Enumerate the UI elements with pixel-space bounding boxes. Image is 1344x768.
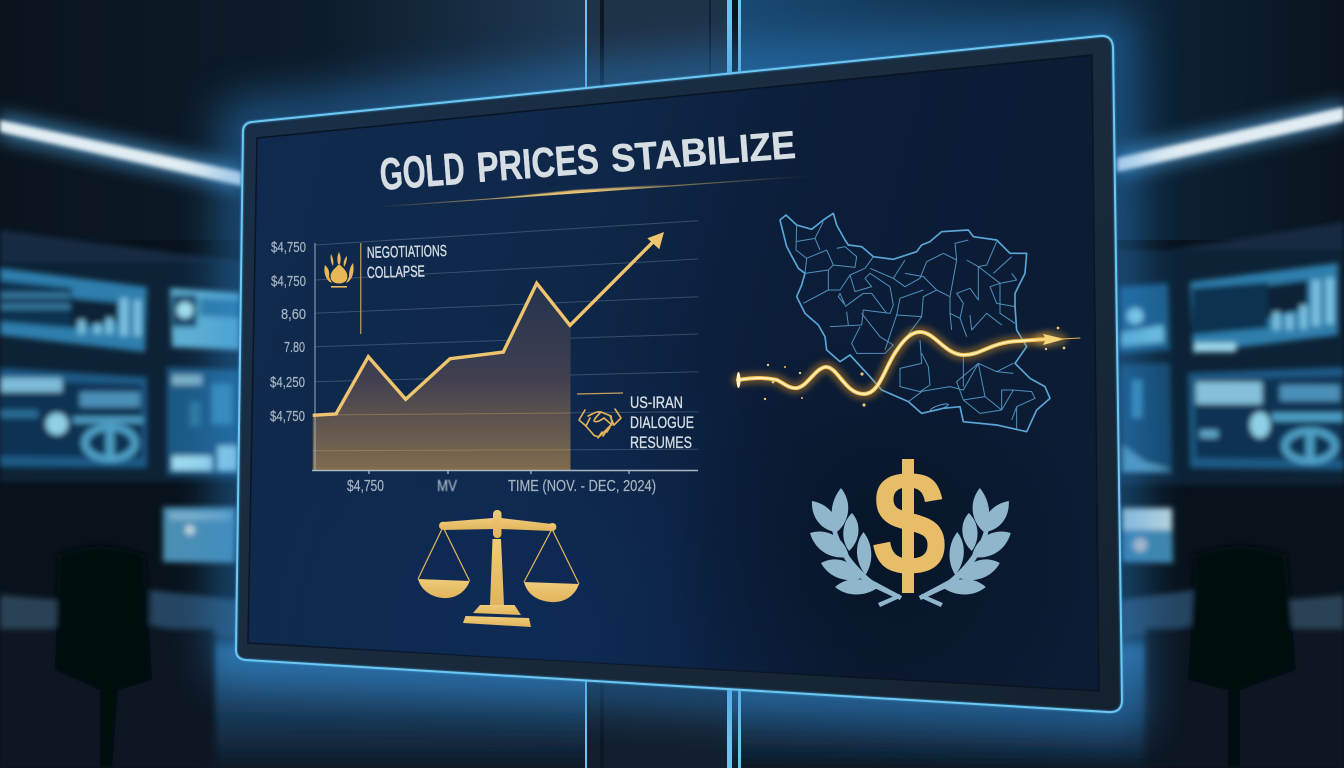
title: PRICES [475,135,600,191]
dollar sign: $ [871,440,947,608]
monitor: upper left chart [0,268,147,352]
pillar [586,0,730,768]
background desks and chairs [0,546,1344,768]
pillar light lines [585,0,741,768]
screen dark patch [248,55,1099,691]
left ceiling light strip [0,112,242,192]
monitor: right side upper panel [1120,283,1170,353]
monitor: middle side panel [167,367,240,475]
screen shading [248,55,1099,691]
axes [312,243,698,474]
title [378,124,797,200]
y axis labels [270,239,306,425]
left chair [55,546,152,768]
price line and arrow [313,232,664,415]
icon: dollar and laurel [810,440,1011,608]
divider flare [736,372,740,388]
left branch [810,488,902,607]
callout text: RESUMES [630,434,692,452]
monitor: right side lower panel [1122,508,1173,563]
area under line [313,283,570,470]
y axis labels: $4,750 [270,408,305,425]
callout leader line [360,243,362,334]
arrow head [1043,334,1065,345]
callout text: DIALOGUE [630,414,694,432]
icon: flame [324,252,354,288]
callout: negotiations collapse [324,243,447,334]
right ceiling light strip [1117,100,1344,178]
monitor: lower left gauges [0,368,147,468]
laurel wreath [810,488,1011,607]
callout text: US-IRAN [630,394,683,412]
y axis labels: $4,750 [271,239,306,256]
left background monitors [0,268,240,563]
island [930,403,949,412]
divider [738,215,740,570]
monitor: upper right chart [1190,263,1338,353]
screen surface [248,55,1099,691]
callout text: NEGOTIATIONS [367,243,447,262]
y axis labels: 8,60 [281,306,306,323]
display glow [236,35,1122,712]
panel: display screen [236,36,1122,712]
x axis labels: MV [437,478,457,495]
x axis labels: TIME (NOV. - DEC, 2024) [508,478,656,495]
map: iran provinces [780,213,1050,432]
sparkles [764,327,1065,407]
icon: handshake [579,409,621,438]
monitor: lower right gauges [1188,367,1344,470]
map internal borders [796,222,1035,430]
neon frame edge [236,36,1122,712]
y axis labels: 7.80 [284,339,305,356]
floor [200,640,1160,768]
chart: gold price line [270,221,698,495]
title: GOLD [378,143,467,200]
x axis labels: $4,750 [347,478,384,495]
callout leader line [577,393,623,394]
monitor: right side middle panel [1120,363,1172,475]
map outline [780,213,1050,432]
callout text: COLLAPSE [367,263,425,282]
monitor: lower side panel [163,507,237,563]
display frame [236,36,1122,712]
title: STABILIZE [609,124,797,181]
icon: balance scale [418,510,579,627]
right branch [919,488,1011,607]
right chair [1188,546,1296,768]
x axis labels [347,478,656,495]
callout text [630,394,694,452]
right background monitors [1120,263,1344,563]
title underline [377,176,810,207]
callout text [367,243,447,282]
y axis labels: $4,750 [271,273,306,290]
grid lines [315,221,698,451]
callout: us-iran dialogue [577,393,694,452]
wave: glowing gold arrow [736,327,1080,407]
y axis labels: $4,250 [270,374,305,391]
monitor: upper side panel [170,288,240,350]
